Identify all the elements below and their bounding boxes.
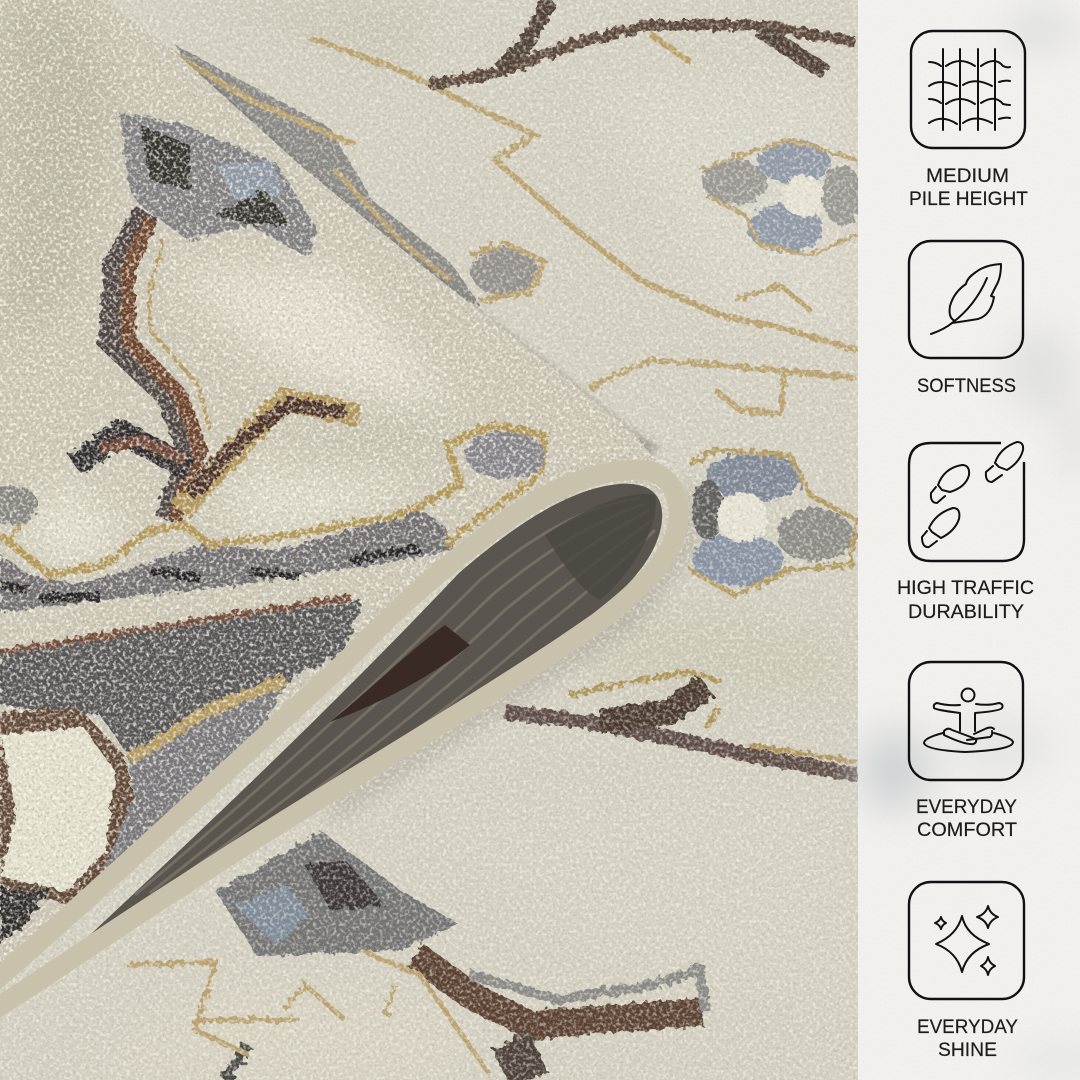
cream blob (0, 727, 115, 892)
icon: pile fibres (911, 31, 1025, 148)
icon: footprints (909, 442, 1024, 561)
feature: everyday shine: SHINE (938, 1039, 997, 1061)
gold outline (0, 425, 545, 575)
panel: marble sidebar background (858, 0, 1080, 1080)
feature: everyday comfort (909, 662, 1023, 841)
central brown stem (112, 212, 192, 520)
flower upper right (700, 140, 862, 255)
panel: rug photograph (0, 0, 862, 1080)
left branch (75, 432, 190, 470)
feature: medium pile height: PILE HEIGHT (909, 188, 1028, 210)
feature: everyday comfort: COMFORT (917, 819, 1017, 841)
shadow along fold edge (175, 52, 660, 460)
back rug motifs (125, 0, 862, 1080)
grain over back rug (0, 0, 858, 1080)
grey band (0, 510, 455, 612)
front folded rug (0, 0, 700, 1010)
feature: high traffic durability (897, 442, 1034, 623)
feature: medium pile height (909, 31, 1028, 210)
feature: high traffic durability: DURABILITY (908, 601, 1024, 623)
icon: meditating figure (909, 662, 1023, 780)
lower gold vines (125, 950, 490, 1075)
grey leaf motif (120, 113, 317, 257)
right branch (180, 400, 360, 510)
feature: softness (909, 241, 1023, 397)
gold vines upper (165, 38, 857, 413)
gold accents in dark panel (130, 680, 285, 760)
lower grey region (100, 680, 289, 900)
label: EVERYDAY (917, 1016, 1018, 1038)
icon: sparkles (909, 882, 1024, 999)
flower middle right (690, 450, 857, 595)
label: HIGH TRAFFIC (897, 577, 1034, 599)
back rug tonal patches (320, 8, 819, 676)
label: MEDIUM (926, 165, 1009, 187)
grey motif behind fold edge (175, 45, 480, 305)
corner dark motif (0, 888, 50, 944)
lower motif (216, 831, 459, 956)
rug underside (90, 484, 662, 935)
top brown branch (430, 25, 855, 85)
rug edge binding (0, 470, 679, 1012)
icon: feather (909, 241, 1023, 358)
feature: everyday shine (909, 882, 1024, 1061)
brown outline cream blob (0, 707, 133, 905)
fold shadow on back rug (330, 470, 700, 825)
small flower centre (471, 248, 539, 296)
dark grey panel (0, 600, 363, 755)
brown branch right (505, 712, 857, 775)
label: EVERYDAY (916, 796, 1017, 818)
rug grain on fold (0, 0, 700, 1010)
grey flower on fold (465, 431, 545, 479)
label: SOFTNESS (917, 375, 1016, 397)
